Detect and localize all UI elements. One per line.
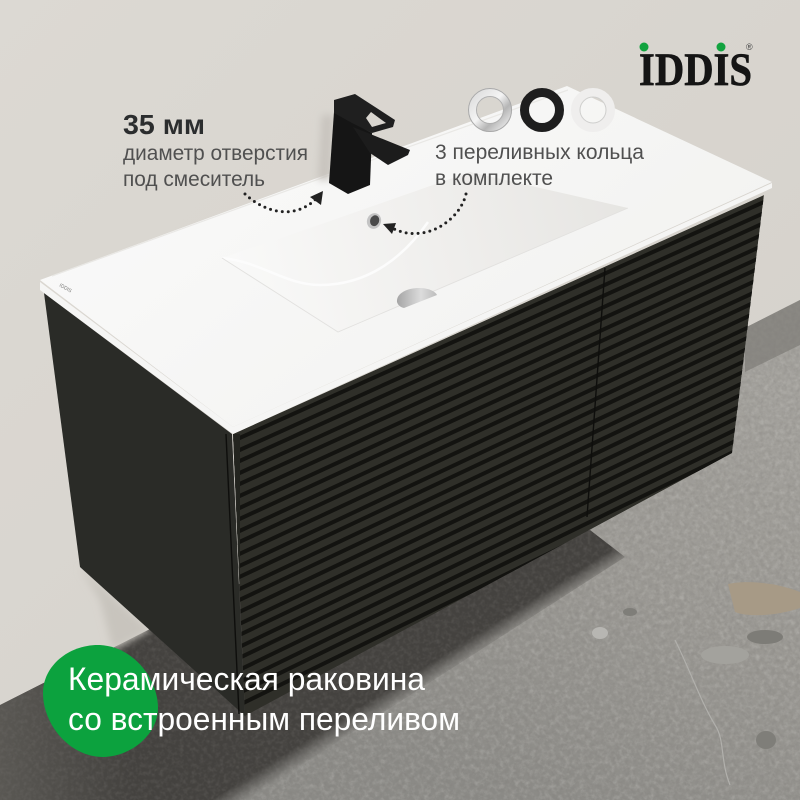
counter front edge	[40, 183, 772, 434]
title	[68, 661, 460, 737]
back rim line	[52, 90, 568, 276]
faucet	[318, 94, 410, 194]
title: Керамическая раковина	[68, 661, 426, 697]
callout: overflow rings: в комплекте	[435, 166, 553, 190]
green blob	[43, 645, 158, 757]
faucet shadow on wall	[318, 115, 333, 180]
title: со встроенным переливом	[68, 701, 460, 737]
callout value: 35 мм	[123, 109, 205, 140]
arrow: to faucet hole	[245, 191, 323, 212]
wall shadow under cabinet	[80, 567, 150, 650]
icon: chrome ring	[468, 88, 512, 132]
stone floor	[0, 290, 800, 800]
icon: black ring	[524, 92, 560, 128]
floor stone details	[592, 582, 800, 785]
washbasin countertop	[40, 86, 772, 434]
cabinet front panel with horizontal ribs	[232, 195, 764, 724]
callout description: диаметр отверстия	[123, 141, 308, 165]
small brand mark on counter: IDDIS	[58, 283, 73, 295]
cabinet edge and door gap lines	[226, 268, 605, 714]
basin front fold	[222, 208, 628, 332]
icon: white ring	[576, 92, 610, 128]
callout: hole diameter: под смеситель	[123, 167, 265, 191]
arrow: to overflow ring	[383, 194, 466, 234]
faucet handle	[334, 94, 395, 133]
callout: hole diameter	[123, 109, 308, 191]
faucet body	[329, 112, 372, 194]
cabinet	[44, 195, 764, 724]
basin bowl	[222, 172, 628, 332]
counter top surface	[40, 86, 772, 427]
cabinet side panel	[44, 293, 245, 716]
callout: overflow rings	[435, 88, 644, 190]
logo: IDDIS: IDDIS	[639, 44, 752, 96]
faucet spout	[353, 127, 410, 165]
logo: IDDIS: ®	[746, 42, 753, 52]
basin highlight curve	[222, 222, 428, 285]
callout description: 3 переливных кольца	[435, 140, 644, 164]
handle opening	[366, 112, 386, 127]
drain	[397, 288, 437, 308]
overflow ring	[365, 211, 383, 231]
